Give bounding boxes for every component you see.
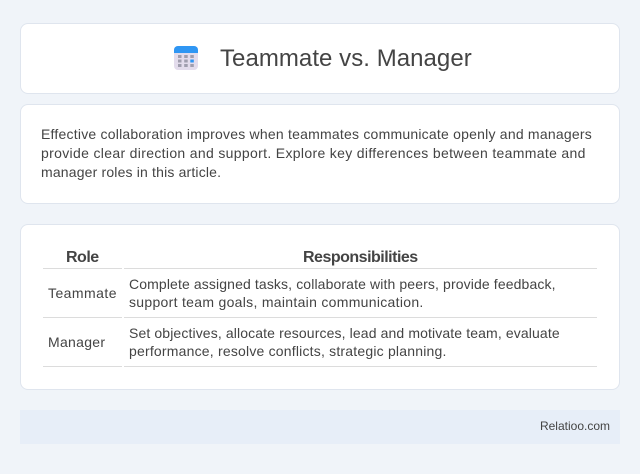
icon: calendar: [174, 46, 198, 70]
table header: Responsibilities: Responsibilities: [303, 249, 418, 266]
panel: title card: [20, 23, 620, 94]
text block: introduction: [41, 126, 592, 180]
table row: Manager: performance, resolve conflicts, strategic planning.: [129, 343, 447, 359]
table header: Role: Role: [66, 249, 99, 266]
panel: comparison table: [20, 224, 620, 390]
table row: Teammate: support team goals, maintain communication.: [129, 294, 424, 310]
text block: introduction: manager roles in this article.: [41, 164, 221, 180]
table row: Manager: Set objectives, allocate resources, lead and motivate team, evaluate: [129, 325, 560, 341]
table row: Teammate: [48, 276, 556, 310]
heading: Teammate vs. Manager: [220, 45, 472, 72]
table row: Teammate: Complete assigned tasks, collaborate with peers, provide feedback,: [129, 276, 556, 292]
text block: introduction: Effective collaboration improves when teammates communicate openly and managers: [41, 126, 592, 142]
table row: Teammate: Teammate: [48, 285, 117, 301]
table row: Manager: Manager: [48, 334, 105, 350]
footer bar: [20, 410, 620, 444]
table row: Manager: [48, 325, 560, 359]
text block: introduction: provide clear direction and support. Explore key differences between teammate and: [41, 145, 586, 161]
footer text: Relatioo.com: [540, 419, 610, 433]
panel: introduction: [20, 104, 620, 204]
